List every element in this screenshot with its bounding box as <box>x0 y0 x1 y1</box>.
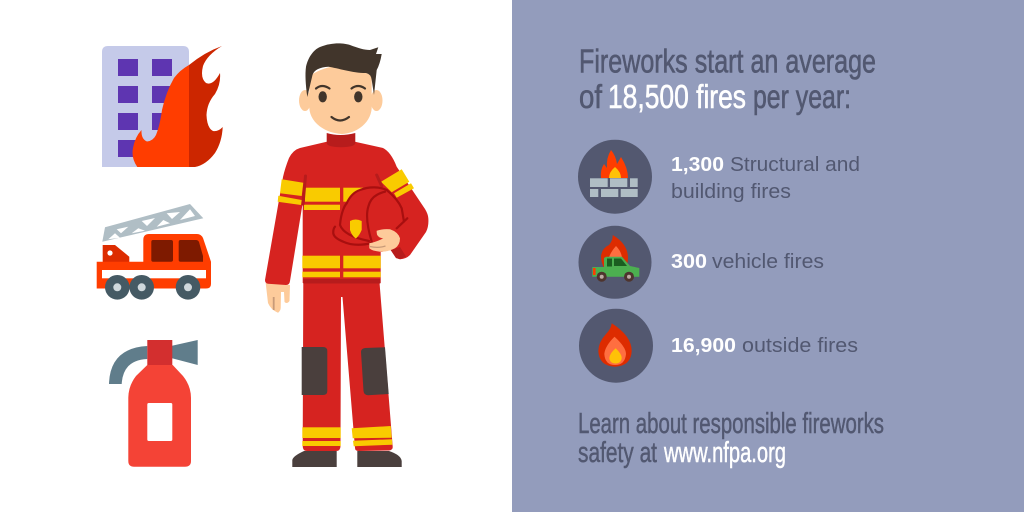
face <box>309 66 372 134</box>
hair <box>305 43 382 97</box>
helmet <box>333 187 407 245</box>
arm shadow <box>391 247 406 259</box>
pants <box>303 280 393 451</box>
text: vehicle fires: 300 <box>671 251 707 273</box>
text: vehicle fires: vehicle fires <box>712 251 824 273</box>
icon: fire extinguisher <box>109 340 198 467</box>
text: structural fires: Structural and <box>730 154 860 176</box>
heading <box>579 42 876 115</box>
icon: flame <box>579 309 653 383</box>
boots <box>292 451 402 467</box>
heading: per year: <box>753 78 851 115</box>
panel: right statistics background <box>512 0 1024 512</box>
text: vehicle fires <box>671 251 824 273</box>
footer call to action <box>578 408 884 469</box>
right hand <box>369 229 400 252</box>
knee pads <box>302 347 389 395</box>
text: structural fires: building fires <box>671 181 791 203</box>
trouser cuff bands <box>302 426 392 446</box>
icon: brick wall on fire <box>578 140 652 214</box>
text: outside fires <box>671 335 858 357</box>
heading: of <box>579 78 603 115</box>
collar <box>327 133 355 147</box>
icon: burning vehicle <box>578 226 652 299</box>
icon: burning building <box>102 46 223 167</box>
text: structural fires: 1,300 <box>671 154 724 176</box>
heading: Fireworks start an average <box>579 42 876 80</box>
icon: fire truck <box>97 204 211 300</box>
illustration: firefighter holding helmet <box>265 43 428 467</box>
sleeve and chest bands <box>278 169 414 277</box>
belt <box>303 279 380 284</box>
jacket <box>265 142 428 285</box>
ears <box>299 90 382 111</box>
footer call to action: Learn about responsible fireworks <box>578 408 884 440</box>
left hand <box>266 283 290 313</box>
heading: 18,500 fires <box>608 78 746 115</box>
footer call to action: www.nfpa.org <box>663 437 786 469</box>
text: outside fires: outside fires <box>742 335 858 357</box>
eyes, brows and smile <box>316 86 365 120</box>
footer call to action: safety at <box>578 437 657 469</box>
text: structural fires <box>671 154 860 203</box>
arm creases <box>303 175 382 204</box>
text: outside fires: 16,900 <box>671 335 736 357</box>
